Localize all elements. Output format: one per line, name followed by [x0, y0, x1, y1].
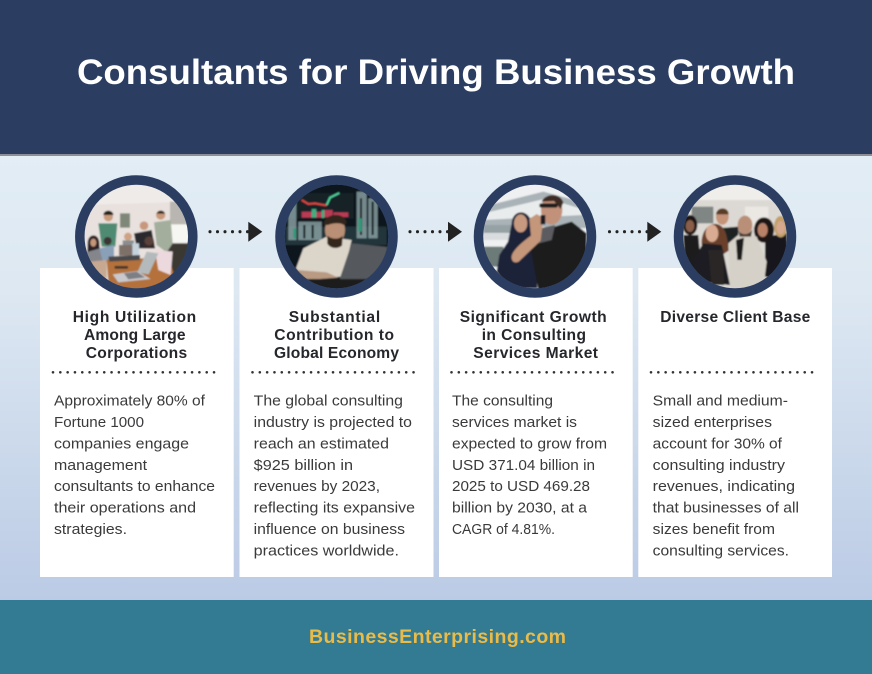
- panel: significant growth: [439, 268, 633, 577]
- body text: billion by 2030, at a: [452, 500, 588, 517]
- panel: high utilization: [40, 268, 234, 577]
- photo circle: team around table: [80, 180, 193, 293]
- body text: their operations and: [54, 500, 196, 517]
- panel: diverse client base: [638, 268, 832, 577]
- body text: management: [54, 457, 148, 474]
- body text: reflecting its expansive: [254, 500, 415, 517]
- body text: sizes benefit from: [653, 521, 775, 538]
- photo circle: group of professionals: [678, 180, 793, 293]
- header band: [0, 0, 872, 156]
- body text: Fortune 1000: [54, 414, 144, 431]
- body text: [54, 392, 215, 538]
- footer site name: BusinessEnterprising.com: [309, 626, 566, 648]
- body text: sized enterprises: [653, 414, 772, 431]
- body text: that businesses of all: [653, 500, 799, 517]
- body text: $925 billion in: [254, 457, 353, 474]
- body text: revenues by 2023,: [254, 478, 380, 495]
- dotted divider: [452, 371, 613, 374]
- body text: [254, 392, 415, 559]
- body text: influence on business: [254, 521, 405, 538]
- heading: significant growth: Significant Growth: [460, 309, 607, 326]
- body text: The consulting: [452, 392, 553, 410]
- body text: [452, 392, 607, 538]
- body text: practices worldwide.: [254, 542, 399, 559]
- body text: revenues, indicating: [653, 478, 795, 495]
- heading: significant growth: [460, 309, 607, 362]
- body text: companies engage: [54, 435, 189, 452]
- body text: Small and medium-: [653, 392, 788, 410]
- body text: account for 30% of: [653, 435, 783, 452]
- body text: consulting industry: [653, 457, 785, 474]
- heading: high utilization: Corporations: [86, 345, 188, 362]
- heading: diverse client base: Diverse Client Base: [660, 309, 811, 326]
- arrow 1: [210, 222, 262, 242]
- heading: substantial contribution: Substantial: [289, 309, 380, 326]
- body text: Approximately 80% of: [54, 392, 206, 410]
- dotted divider: [651, 371, 813, 374]
- body text: [653, 392, 799, 559]
- heading: substantial contribution: [274, 309, 399, 362]
- heading: high utilization: High Utilization: [73, 309, 196, 326]
- arrow 3: [610, 222, 661, 242]
- body text: The global consulting: [254, 392, 403, 410]
- body text: reach an estimated: [254, 435, 389, 452]
- footer band: [0, 600, 872, 674]
- arrow 2: [410, 222, 462, 242]
- title: Consultants for Driving Business Growth: [77, 53, 795, 92]
- heading: significant growth: in Consulting: [482, 327, 586, 344]
- body text: CAGR of 4.81%.: [452, 521, 555, 538]
- body text: consultants to enhance: [54, 478, 215, 495]
- body text: 2025 to USD 469.28: [452, 478, 590, 495]
- photo circle: man on phone with colleague: [478, 180, 593, 293]
- body text: USD 371.04 billion in: [452, 457, 595, 474]
- heading: high utilization: Among Large: [84, 327, 186, 344]
- body text: consulting services.: [653, 542, 789, 559]
- panel: substantial contribution: [240, 268, 434, 577]
- heading: substantial contribution: Contribution to: [274, 327, 394, 344]
- background gradient: [0, 155, 872, 600]
- heading: significant growth: Services Market: [473, 345, 598, 362]
- dotted divider: [252, 371, 414, 374]
- body text: strategies.: [54, 521, 127, 538]
- heading: high utilization: [73, 309, 196, 362]
- body text: industry is projected to: [254, 414, 412, 431]
- dotted divider: [53, 371, 215, 374]
- heading: substantial contribution: Global Economy: [274, 345, 399, 362]
- body text: expected to grow from: [452, 435, 607, 452]
- photo circle: analyst at trading screens: [280, 180, 393, 293]
- body text: services market is: [452, 414, 577, 431]
